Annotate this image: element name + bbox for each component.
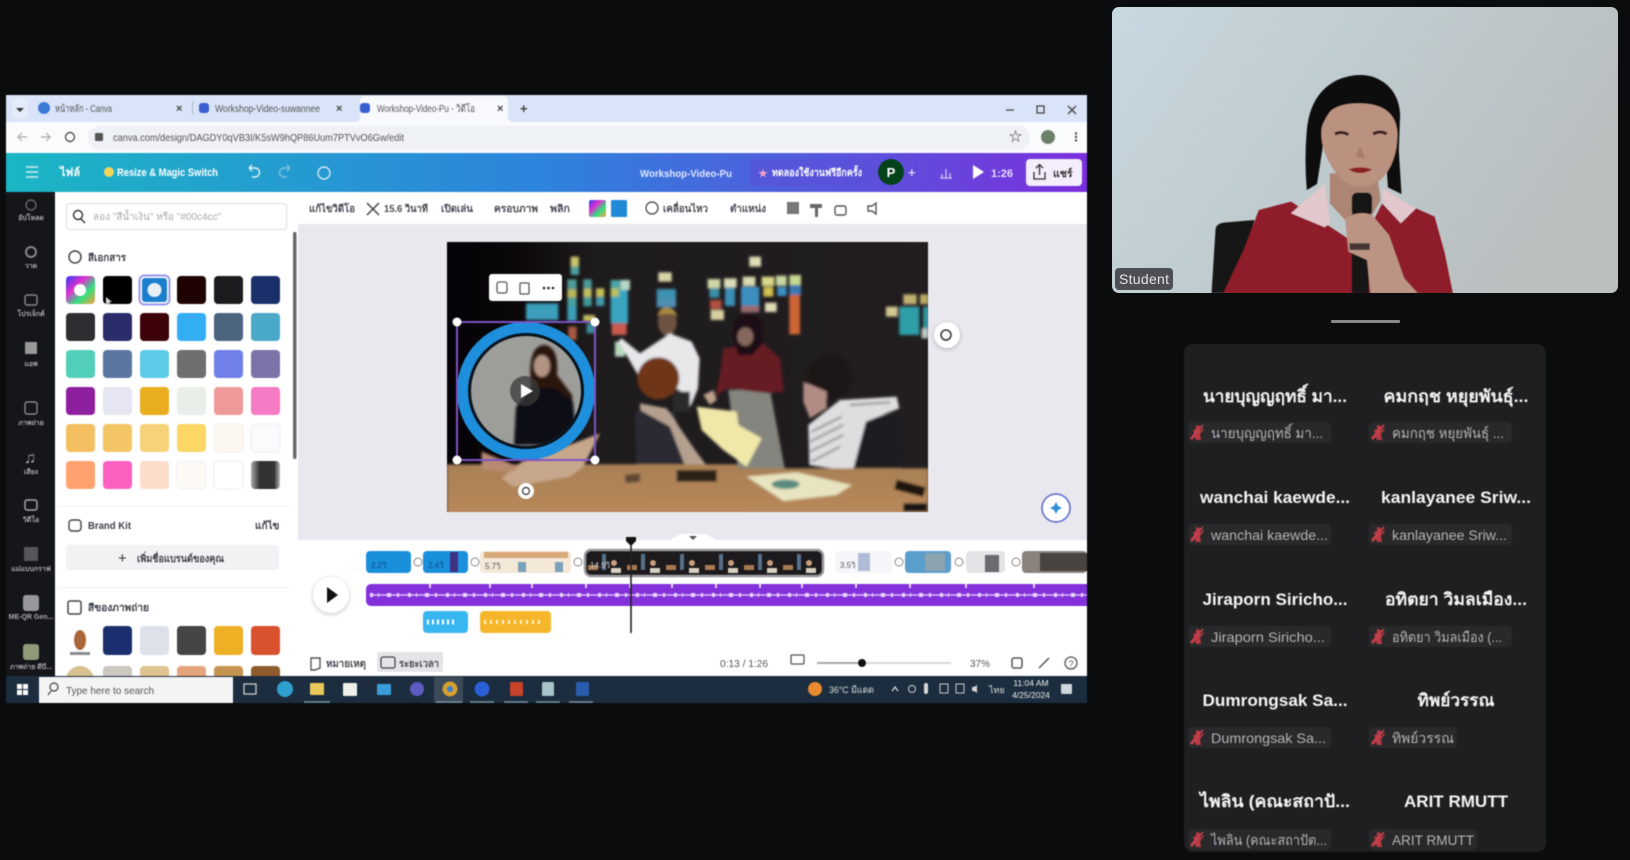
weather: 36°C มีแดด — [829, 684, 874, 696]
browser window: Canva editor — [6, 95, 1087, 703]
tab: active Workshop-Video-Pu: Workshop-Video-Pu - วิดีโอ — [377, 102, 475, 115]
sticky notes right and people — [640, 257, 928, 513]
search box — [66, 204, 286, 230]
participant 10 — [1369, 792, 1509, 850]
video edit toolbar: แก้ไขวิดีโอ — [309, 202, 355, 215]
left icon rail: เสียง — [24, 468, 39, 476]
name tag: Student — [1119, 271, 1169, 287]
video clips track: 2.2วิ — [371, 561, 387, 570]
collapse tab — [668, 534, 718, 541]
participant 8: ทิพย์วรรณ — [1392, 730, 1454, 746]
share button — [1026, 159, 1082, 186]
participant 6: อทิตยา วิมลเมือง... — [1385, 589, 1527, 609]
trial button — [750, 159, 875, 186]
heading: document colours: สีเอกสาร — [88, 252, 127, 264]
Canva top bar: + — [908, 165, 916, 180]
heading: Brand Kit: Brand Kit — [88, 521, 132, 532]
address bar: ⋮ — [1070, 130, 1082, 144]
laptop — [502, 433, 600, 487]
participant 4: kanlayanee Sriw... — [1392, 527, 1507, 543]
video edit toolbar: พลิก — [550, 203, 570, 215]
resize button text: Resize & Magic Switch — [117, 167, 218, 179]
browser tab strip — [6, 95, 1087, 122]
tab: active Workshop-Video-Pu: × — [497, 103, 503, 115]
time counter: 0:13 / 1:26 — [720, 658, 768, 670]
add brand button: เพิ่มชื่อแบรนด์ของคุณ — [137, 551, 225, 565]
tab: Workshop-Video-suwannee: × — [336, 103, 342, 115]
Canva top bar — [6, 153, 1087, 192]
weather — [808, 682, 874, 696]
canvas area — [298, 224, 1087, 541]
present button — [973, 165, 1013, 180]
url text: canva.com/design/DAGDY0qVB3I/K5sW9hQP86Uum7PTVvO6Gw/edit — [113, 132, 404, 144]
collar right — [1382, 188, 1416, 223]
participant 7 — [1188, 691, 1348, 748]
trial button: ★ — [758, 169, 768, 180]
left icon rail — [6, 192, 55, 676]
video clips track — [366, 550, 1087, 576]
system tray: ไทย — [988, 685, 1005, 695]
participant 6: อทิตยา วิมลเมือง (... — [1392, 629, 1502, 645]
heading: photo colours: สีของภาพถ่าย — [88, 602, 149, 614]
video edit toolbar — [298, 192, 1087, 224]
participant 5 — [1188, 590, 1348, 647]
selected clip: 14.9วิ — [590, 561, 610, 570]
photo palette swatches — [66, 625, 281, 677]
participant 8: ทิพย์วรรณ — [1418, 690, 1495, 710]
participant 1: นายบุญญฤทธิ์ มา... — [1203, 383, 1347, 407]
tab: Canva home: หน้าหลัก - Canva — [55, 103, 112, 115]
duration button: ระยะเวลา — [399, 659, 439, 670]
participant 1: นายบุญญฤทธิ์ มา... — [1211, 423, 1323, 442]
tile divider handle — [1331, 320, 1400, 323]
selected clip — [585, 550, 823, 576]
speaker video tile — [1112, 7, 1618, 312]
tab: Canva home — [38, 102, 182, 115]
floating context menu — [489, 274, 562, 301]
left icon rail: ME-QR Gen... — [9, 614, 53, 621]
participant 2: คมกฤช หยุยพันธุ์ ... — [1392, 425, 1504, 442]
participant 6 — [1369, 589, 1527, 647]
clock: 11:04 AM — [1013, 678, 1049, 688]
left icon rail: ♫ — [24, 450, 36, 467]
participant 3 — [1188, 488, 1350, 545]
share button: แชร์ — [1053, 167, 1073, 180]
participant 7: Dumrongsak Sa... — [1202, 691, 1348, 710]
comment button — [934, 322, 960, 348]
colour chips — [589, 200, 627, 217]
timeline panel — [298, 534, 1087, 676]
left icon rail: โปรเจ็กต์ — [16, 309, 45, 318]
heading: document colours — [69, 251, 127, 264]
avatar P: P — [887, 165, 896, 180]
avatar P — [878, 159, 904, 185]
participant 9: ไพลิน (คณะสถาปั... — [1198, 791, 1350, 811]
search box — [39, 677, 233, 703]
duration button — [377, 652, 443, 672]
left icon rail: วาด — [25, 263, 38, 270]
man in white shirt — [618, 307, 700, 412]
video clips track: 5.7วิ — [485, 562, 501, 571]
document title: Workshop-Video-Pu — [640, 168, 732, 180]
participant 2: คมกฤช หยุยพันธุ์... — [1384, 386, 1528, 407]
left icon rail: ภาพถ่าย — [18, 419, 44, 427]
standing woman — [703, 313, 785, 470]
taskbar app icons — [277, 677, 593, 703]
participant 5: Jiraporn Siricho... — [1211, 629, 1325, 645]
participant 4: kanlayanee Sriw... — [1381, 488, 1531, 507]
video edit toolbar: ตำแหน่ง — [730, 203, 766, 215]
face — [1321, 103, 1397, 187]
left icon rail: อัปโหลด — [18, 213, 44, 222]
seated woman with red hair — [635, 357, 710, 470]
swatch grid — [66, 276, 280, 489]
search box: Type here to search — [66, 685, 154, 697]
tab: active Workshop-Video-Pu — [354, 96, 514, 122]
new tab button: + — [520, 101, 528, 116]
magic assistant button — [1042, 494, 1070, 522]
notes button: หมายเหตุ — [326, 659, 366, 670]
table right — [640, 468, 928, 513]
video edit toolbar: เปิดเล่น — [441, 203, 473, 215]
video clips track: 2.4วิ — [428, 561, 444, 570]
collar left — [1291, 183, 1330, 227]
participant 10: ARIT RMUTT — [1392, 832, 1474, 848]
selected circular video element — [452, 274, 600, 499]
left icon rail: แอพ — [24, 361, 38, 368]
sticky notes left — [447, 257, 747, 514]
notes button — [311, 658, 366, 670]
left icon rail: วิดีโอ — [22, 515, 39, 524]
clock: 4/25/2024 — [1012, 690, 1050, 700]
tab: Canva home: × — [176, 103, 182, 115]
color side panel — [55, 192, 298, 695]
chair — [1212, 220, 1254, 293]
selection frame — [452, 318, 600, 464]
video edit toolbar: เคลื่อนไหว — [663, 201, 708, 215]
heading: Brand Kit: แก้ไข — [255, 519, 280, 532]
zoom slider — [817, 659, 951, 667]
seated man with striped shirt — [803, 355, 902, 472]
blue audio clip — [423, 611, 468, 633]
participant 2 — [1369, 386, 1528, 443]
address bar — [6, 122, 1087, 153]
system tray — [892, 683, 1005, 695]
Canva top bar: ไฟล์ — [58, 165, 80, 179]
video frame: team at sticky-note wall — [447, 242, 928, 514]
address bar: ☆ — [1009, 129, 1022, 144]
play button — [313, 577, 349, 613]
participant 8 — [1369, 690, 1495, 748]
left icon rail: ภาพถ่าย ดีบี... — [10, 663, 52, 671]
table left — [447, 464, 747, 514]
rotate handle — [518, 483, 534, 499]
clock — [1012, 678, 1050, 700]
participants panel — [1184, 344, 1546, 852]
search box: ลอง "สีน้ำเงิน" หรือ "#00c4cc" — [93, 209, 221, 223]
windows taskbar — [6, 676, 1087, 703]
playhead — [626, 537, 636, 633]
participant 1 — [1188, 383, 1347, 443]
yellow papers — [697, 407, 762, 467]
microphone — [1352, 193, 1372, 216]
hand — [1345, 213, 1418, 293]
present button: 1:26 — [991, 168, 1013, 180]
video edit toolbar: ครอบภาพ — [494, 204, 538, 215]
name tag — [1115, 268, 1173, 290]
tab: Workshop-Video-suwannee: Workshop-Video-suwannee — [215, 104, 320, 115]
video clips track: 3.5วิ — [840, 561, 856, 570]
left icon rail: แม่แบบกราฟ — [11, 565, 51, 573]
add brand button — [66, 545, 279, 570]
participant 9: ไพลิน (คณะสถาปัต... — [1210, 832, 1327, 848]
heading: photo colours — [68, 601, 149, 614]
neck — [1329, 172, 1381, 220]
window controls — [1006, 106, 1076, 114]
heading: Brand Kit — [69, 519, 280, 532]
purple audio track — [366, 584, 1087, 606]
participant 7: Dumrongsak Sa... — [1211, 730, 1326, 746]
participant 4 — [1369, 488, 1531, 545]
participant 5: Jiraporn Siricho... — [1202, 590, 1348, 609]
play overlay — [510, 376, 540, 406]
trial button: ทดลองใช้งานฟรีอีกครั้ง — [772, 165, 862, 179]
participant 10: ARIT RMUTT — [1404, 792, 1509, 811]
red jacket — [1222, 201, 1454, 293]
yellow audio clip — [480, 611, 551, 633]
hair — [1306, 75, 1401, 194]
timeline panel: ? — [1068, 659, 1074, 669]
participant 3: wanchai kaewde... — [1199, 488, 1350, 507]
video edit toolbar: 15.6 วินาที — [384, 203, 428, 215]
participant 9 — [1188, 791, 1350, 850]
participant 3: wanchai kaewde... — [1210, 527, 1328, 543]
add brand button: + — [118, 550, 127, 567]
timeline panel: 37% — [970, 659, 990, 670]
